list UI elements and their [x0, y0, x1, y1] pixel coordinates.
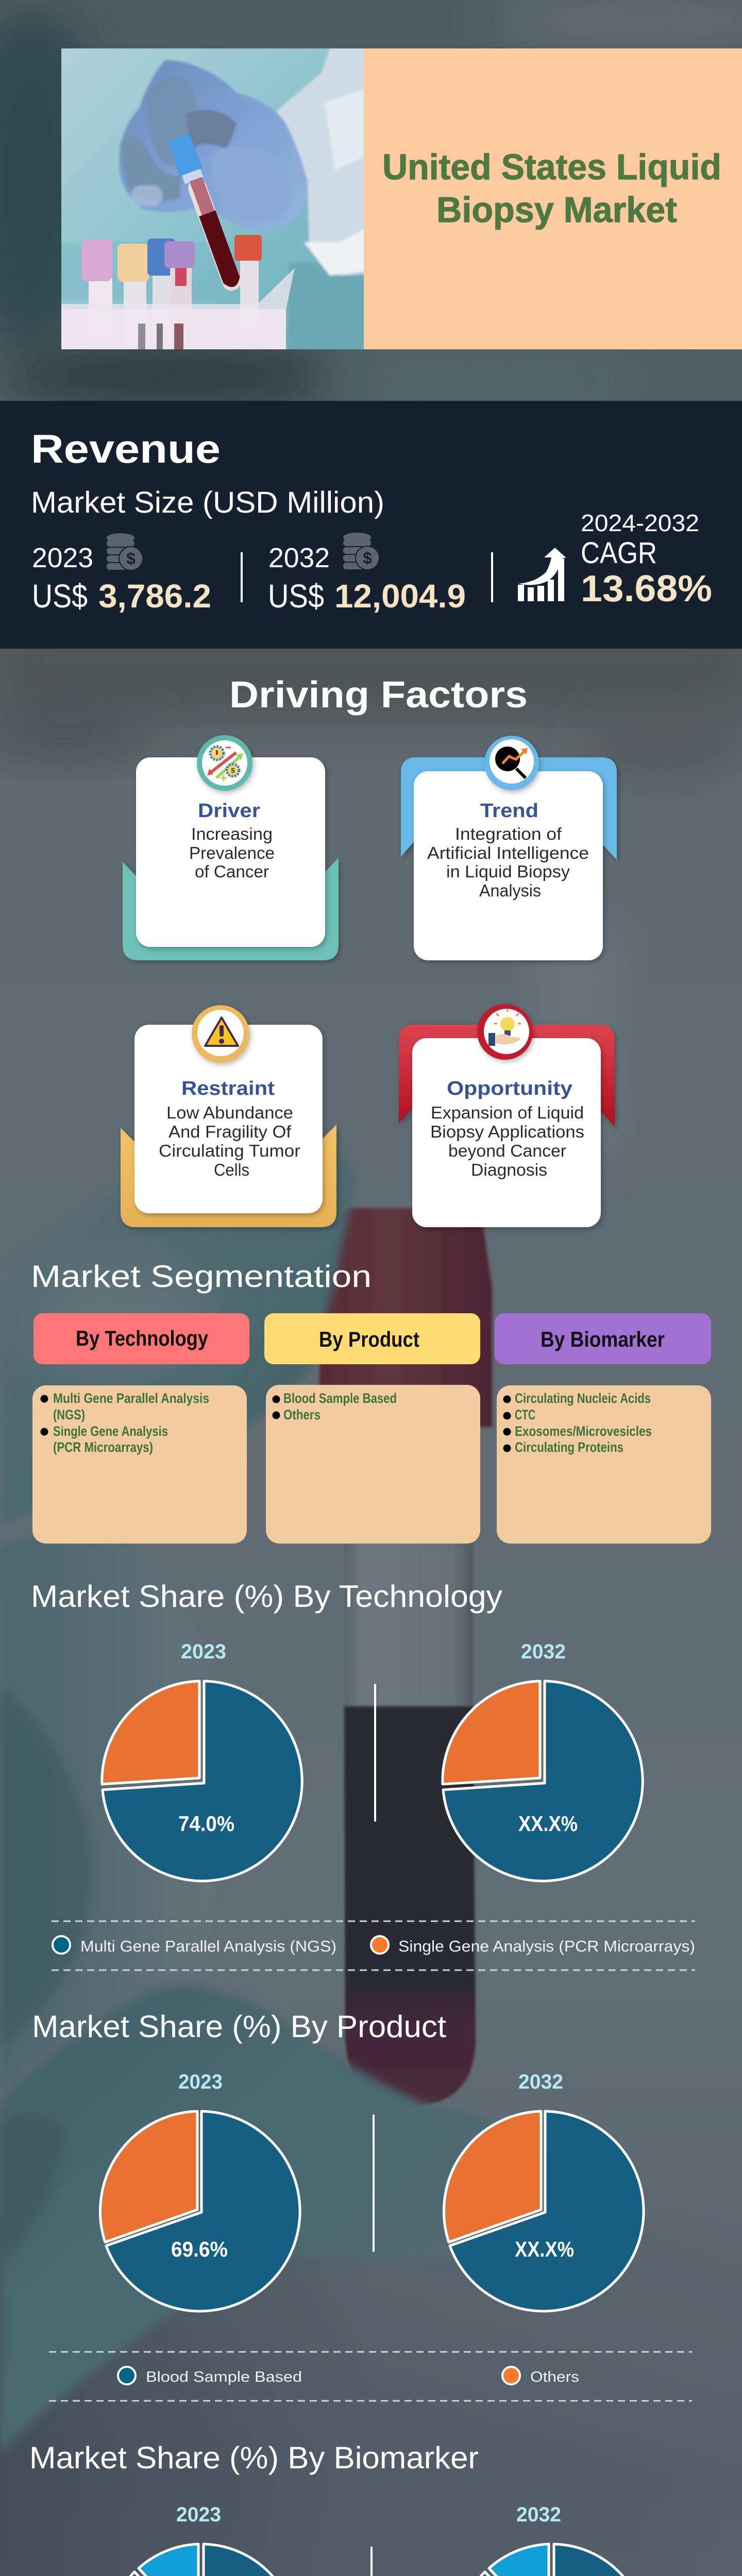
legend: technology: Single Gene Analysis (PCR Microarrays): [398, 1937, 695, 1955]
icon: growth chart arrow: [518, 548, 566, 601]
2023 value block: 3,786.2: [98, 578, 211, 615]
pie chart: technology 2023: 74.0%: [178, 1811, 234, 1836]
panel: restraint: [121, 1005, 336, 1227]
title: United States Liquid: [382, 147, 721, 187]
revenue heading: Revenue: [31, 426, 221, 471]
trend text: in Liquid Biopsy: [446, 862, 570, 881]
2032 value block: [268, 543, 466, 615]
opportunity text: Diagnosis: [471, 1160, 547, 1179]
pie chart: biomarker 2032: [457, 2544, 647, 2576]
restraint text: Cells: [214, 1160, 249, 1179]
glove: upper finger: [0, 1123, 356, 1525]
CAGR block: CAGR: [581, 536, 657, 570]
legend: product: Others: [530, 2369, 579, 2385]
pie chart: product 2023: [100, 2111, 300, 2311]
driver text: [189, 824, 275, 881]
icon: opportunity: [477, 1004, 533, 1060]
panel: trend: [401, 736, 617, 960]
title: Biopsy Market: [436, 190, 677, 230]
segment: by biomarker: By Biomarker: [541, 1327, 665, 1351]
tube cap: [318, 1208, 492, 1427]
segment: by product: By Product: [319, 1327, 419, 1351]
heading: market share by biomarker: Market Share (%) By Biomarker: [29, 2441, 479, 2475]
glove: thumb under tube: [0, 1986, 547, 2452]
divider: [370, 2547, 373, 2576]
restraint text: [159, 1103, 300, 1179]
CAGR block: [581, 510, 712, 609]
legend: technology: [52, 1921, 695, 1970]
pie chart: product 2023: 69.6%: [171, 2237, 228, 2261]
panel: driver: [123, 735, 339, 960]
icon: restraint: [192, 1005, 249, 1063]
segment: by technology: [32, 1313, 249, 1544]
CAGR block: 2024-2032: [581, 510, 699, 536]
market size label: Market Size (USD Million): [31, 486, 384, 519]
year label 2032: 2032: [518, 2071, 563, 2093]
legend: technology: Multi Gene Parallel Analysis (NGS): [80, 1937, 336, 1955]
heading: market share by technology: Market Share (%) By Technology: [31, 1579, 502, 1614]
list: biomarker: Exosomes/Microvesicles: [515, 1423, 652, 1439]
trend text: Integration of: [455, 824, 562, 843]
pie chart: technology 2032: XX.X%: [518, 1811, 578, 1836]
panel: trend: Trend: [480, 800, 538, 822]
title: [382, 147, 721, 230]
panel: driver: Driver: [198, 800, 260, 822]
list: product: Others: [283, 1407, 321, 1422]
hero photo: gloved hand holding blood tube: [57, 44, 368, 353]
opportunity text: [430, 1103, 584, 1179]
pie chart: product 2032: [444, 2111, 644, 2311]
restraint text: Circulating Tumor: [159, 1141, 300, 1160]
legend: product: Blood Sample Based: [146, 2369, 302, 2385]
heading: driving factors: Driving Factors: [229, 674, 528, 716]
icon: driver: $: [231, 766, 235, 774]
heading: market share by product: Market Share (%) By Product: [32, 2009, 446, 2044]
icon: trend: [484, 736, 539, 790]
hero section: [57, 44, 742, 353]
restraint text: Low Abundance: [166, 1103, 293, 1122]
divider: [374, 1684, 376, 1822]
opportunity text: beyond Cancer: [448, 1141, 566, 1160]
year label 2023: 2023: [181, 1640, 226, 1663]
list: product: Blood Sample Based: [283, 1391, 397, 1406]
list: biomarker: Circulating Nucleic Acids: [515, 1391, 651, 1406]
list: technology: (NGS): [53, 1407, 85, 1422]
pie chart: biomarker 2023: [107, 2544, 296, 2576]
list: product: [272, 1391, 397, 1422]
divider: [491, 552, 493, 602]
year label 2023: 2023: [178, 2071, 223, 2093]
trend text: [427, 824, 589, 900]
trend text: Analysis: [479, 881, 541, 900]
2023 value block: US$: [32, 578, 88, 615]
segment: by product: [264, 1313, 480, 1544]
2032 value block: 2032: [268, 543, 330, 573]
icon: coins 2023: $: [126, 549, 136, 568]
heading: market segmentation: Market Segmentation: [31, 1259, 372, 1294]
divider: [241, 552, 243, 602]
2032 value block: US$: [268, 578, 324, 615]
list: biomarker: CTC: [515, 1407, 535, 1422]
pie chart: technology 2023: [102, 1681, 302, 1881]
icon: coins 2023: [107, 533, 143, 570]
CAGR block: 13.68%: [581, 568, 712, 609]
list: technology: Multi Gene Parallel Analysis: [53, 1391, 209, 1406]
pie chart: technology 2032: [443, 1681, 643, 1881]
icon: driver: [197, 735, 252, 791]
restraint text: And Fragility Of: [168, 1122, 292, 1141]
panel: opportunity: Opportunity: [447, 1078, 572, 1099]
icon: coins 2032: [343, 533, 379, 570]
icon: coins 2032: $: [363, 549, 372, 567]
panel: restraint: Restraint: [181, 1078, 275, 1099]
2023 value block: [32, 543, 211, 615]
list: technology: Single Gene Analysis: [53, 1423, 168, 1439]
segment: by biomarker: [495, 1313, 711, 1544]
pie chart: product 2032: XX.X%: [515, 2237, 574, 2261]
list: biomarker: Circulating Proteins: [515, 1439, 623, 1455]
2032 value block: 12,004.9: [334, 578, 466, 615]
year label 2032: 2032: [521, 1640, 566, 1663]
list: technology: [40, 1391, 209, 1455]
driver text: of Cancer: [195, 862, 269, 881]
legend: product: [49, 2352, 692, 2401]
list: biomarker: [503, 1391, 652, 1455]
revenue band: [0, 401, 742, 649]
2023 value block: 2023: [32, 543, 93, 573]
driver text: Prevalence: [189, 843, 275, 862]
trend text: Artificial Intelligence: [427, 843, 589, 862]
segment: by technology: By Technology: [76, 1326, 209, 1350]
year label 2023: 2023: [176, 2503, 221, 2526]
divider: [373, 2114, 375, 2252]
opportunity text: Expansion of Liquid: [431, 1103, 584, 1122]
glove: middle finger: [0, 1535, 137, 2088]
driver text: Increasing: [191, 824, 273, 843]
panel: opportunity: [399, 1004, 615, 1227]
year label 2032: 2032: [516, 2503, 561, 2526]
opportunity text: Biopsy Applications: [430, 1122, 584, 1141]
list: technology: (PCR Microarrays): [53, 1439, 153, 1455]
title panel: [364, 48, 742, 349]
